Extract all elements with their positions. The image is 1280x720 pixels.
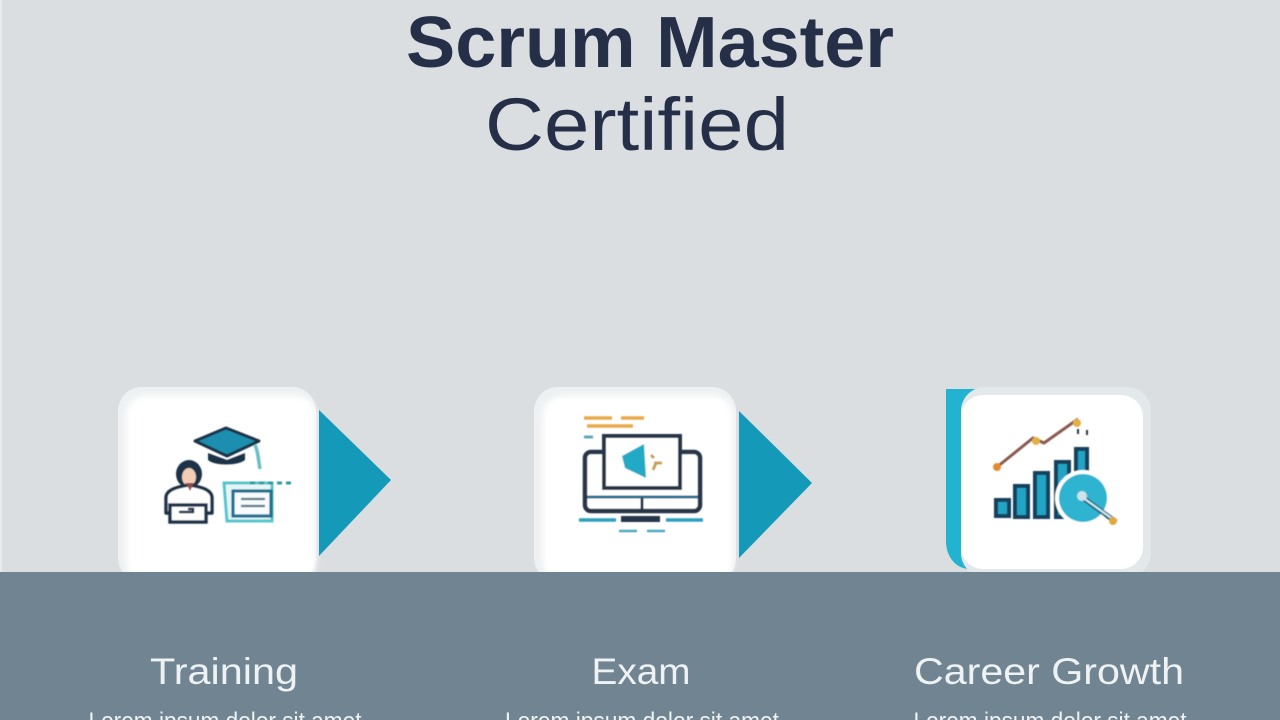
panel: training step xyxy=(88,387,391,720)
title: Certified xyxy=(485,83,789,166)
title xyxy=(406,3,894,166)
icon: monitor with exam screen xyxy=(579,418,703,531)
card: career growth xyxy=(961,387,1151,577)
label: Career Growth: Career Growth xyxy=(914,651,1184,692)
panel: exam step xyxy=(505,387,812,720)
bottom band xyxy=(0,572,1280,720)
card: training xyxy=(118,387,316,582)
label: Exam: Exam xyxy=(592,651,690,692)
icon: growth chart and magnifier xyxy=(993,419,1117,526)
title: Scrum Master xyxy=(406,3,894,83)
panel: career growth step xyxy=(914,387,1187,720)
card: exam xyxy=(534,387,736,582)
arrow: training to exam xyxy=(319,410,391,556)
icon: graduate with cap and folder xyxy=(166,428,293,522)
accent tab xyxy=(946,389,978,569)
label: Training: Training xyxy=(150,651,298,692)
arrow: exam to career growth xyxy=(739,411,812,558)
